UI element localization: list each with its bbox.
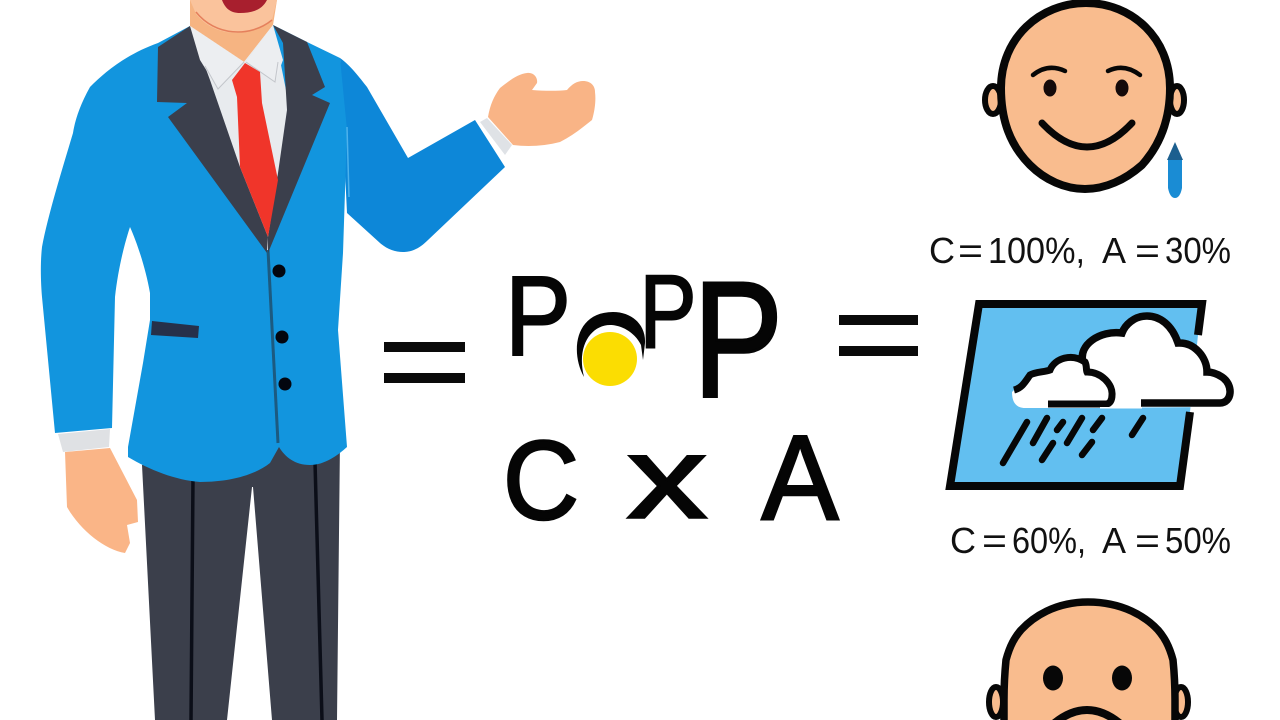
icon: sad face [989,602,1188,720]
ears [985,86,1001,114]
yellow circle with black arc [577,312,645,386]
right lapel [268,25,330,253]
left hand [65,448,138,553]
label: face values: A [1102,230,1134,271]
jacket buttons [272,264,292,390]
pocket [151,321,199,338]
formula: C x A: C [503,418,579,543]
letter P small second: P [640,254,696,370]
icon: blue drop arrow [1167,142,1183,198]
small cloud [1012,357,1112,408]
formula: C x A: A [762,410,839,546]
jacket body [41,25,347,482]
right sleeve [340,58,505,252]
white cloud base [1100,407,1142,408]
left lapel [157,26,268,253]
label: face values: 100%, [988,230,1085,271]
big cloud [1080,316,1231,408]
label: rain values: A [1102,520,1134,561]
label: rain values: = [1135,520,1160,561]
jacket placket line [268,250,278,443]
formula: P o P P [505,248,783,432]
shirt [190,25,290,240]
label: face values: = [958,230,983,271]
presenter figure [41,0,595,720]
head [1001,3,1170,189]
rain streaks [1003,418,1143,463]
frown [1050,710,1124,720]
collar [190,25,283,89]
jacket highlight [347,127,349,197]
panel frame [950,304,1202,486]
letter P small: P [505,253,571,379]
label: face values: C [929,230,965,271]
formula: C x A [503,410,839,546]
right cuff [480,118,512,155]
formula: C x A: x [627,412,707,542]
icon: smiling face [985,3,1184,198]
label: face values: = [1135,230,1160,271]
right hand [488,73,595,146]
label: rain values: 50% [1165,520,1231,561]
red tie [232,63,278,237]
left shirt cuff [58,429,110,452]
mouth [222,0,267,13]
ears [989,687,1003,717]
first equals sign [384,342,465,383]
smile [1042,123,1132,147]
letter P large: P [693,248,783,432]
eyes [1043,666,1063,690]
label: rain values: = [982,520,1007,561]
eyes [1044,80,1056,96]
head [1004,602,1175,720]
label: rain values: C [950,520,986,561]
label: face values: 30% [1165,230,1231,271]
sky panel [950,304,1202,486]
eyebrows [1033,68,1140,75]
trousers [142,440,340,720]
label: rain values: 60%, [1012,520,1086,561]
neck and face [190,0,277,62]
second equals sign [839,315,918,356]
icon: rain cloud panel [950,304,1231,486]
